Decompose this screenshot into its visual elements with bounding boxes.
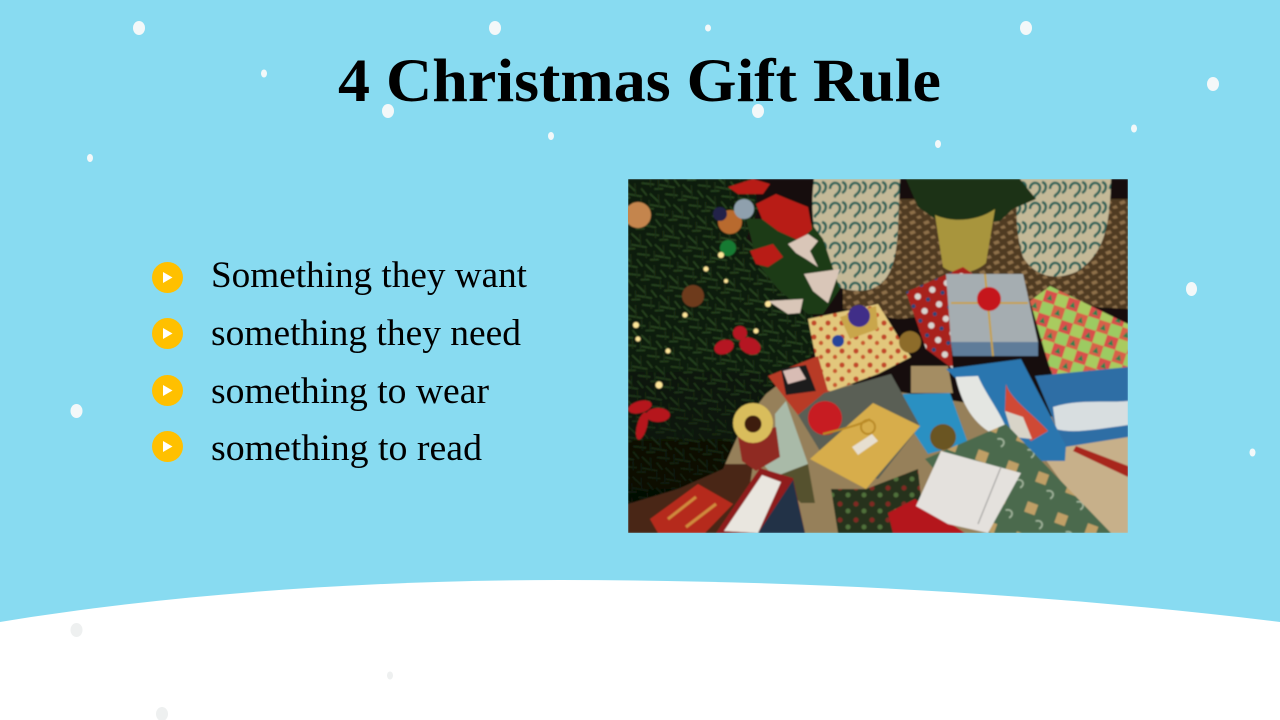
tree shadow bbox=[628, 349, 808, 504]
bullet item 2: something they need bbox=[211, 313, 521, 354]
snowy ground bbox=[0, 580, 1280, 720]
bullet list bbox=[152, 255, 528, 469]
olive box bbox=[781, 464, 816, 504]
gift tag card bbox=[763, 401, 808, 477]
christmas tree bbox=[628, 179, 813, 504]
tree lights bbox=[633, 252, 771, 388]
sunflower bbox=[733, 403, 780, 471]
red poinsettia bbox=[728, 179, 812, 267]
bullet item 3: something to wear bbox=[211, 371, 489, 412]
plant bbox=[906, 179, 1036, 226]
greenery bbox=[746, 219, 840, 314]
carpet bbox=[1046, 436, 1128, 533]
red box bbox=[768, 356, 828, 415]
colourful gift bbox=[1029, 285, 1128, 376]
ornaments bbox=[625, 202, 651, 228]
blue wrapped box right bbox=[1035, 367, 1128, 447]
dark gift bbox=[831, 469, 925, 533]
santa gift bbox=[946, 359, 1066, 461]
red bow bbox=[808, 401, 842, 435]
ground snowflakes bbox=[70, 623, 393, 720]
snowflakes bbox=[70, 21, 1256, 456]
red floral box bbox=[650, 484, 733, 533]
gift bag bbox=[716, 468, 805, 533]
red wrapped gifts bbox=[906, 267, 973, 369]
mulch floor bbox=[843, 199, 1128, 319]
green wrap gift bbox=[925, 424, 1111, 533]
white poinsettia bbox=[768, 234, 840, 314]
photo: Christmas presents under tree bbox=[625, 179, 1128, 533]
pot bbox=[935, 209, 995, 273]
floral gift bbox=[808, 304, 911, 394]
title: 4 Christmas Gift Rule bbox=[338, 48, 941, 115]
red ribbon right bbox=[1073, 446, 1128, 477]
silver gift bbox=[946, 274, 1038, 356]
left vase bbox=[812, 179, 900, 291]
blue foil gift bbox=[903, 393, 968, 454]
under-tree shadow bbox=[628, 464, 753, 533]
red tree bows bbox=[712, 326, 763, 358]
small bow bbox=[899, 331, 921, 353]
yellow envelope bbox=[810, 403, 920, 489]
white envelope bbox=[916, 451, 1021, 533]
tan floor patch bbox=[911, 366, 953, 393]
bullet item 4: something to read bbox=[211, 428, 483, 469]
wrap bbox=[798, 374, 920, 479]
lower floor bbox=[724, 384, 1060, 533]
red gift bbox=[888, 499, 965, 533]
bullet item 1: Something they want bbox=[211, 255, 528, 296]
right vase bbox=[1017, 179, 1111, 276]
black box bbox=[781, 365, 816, 395]
